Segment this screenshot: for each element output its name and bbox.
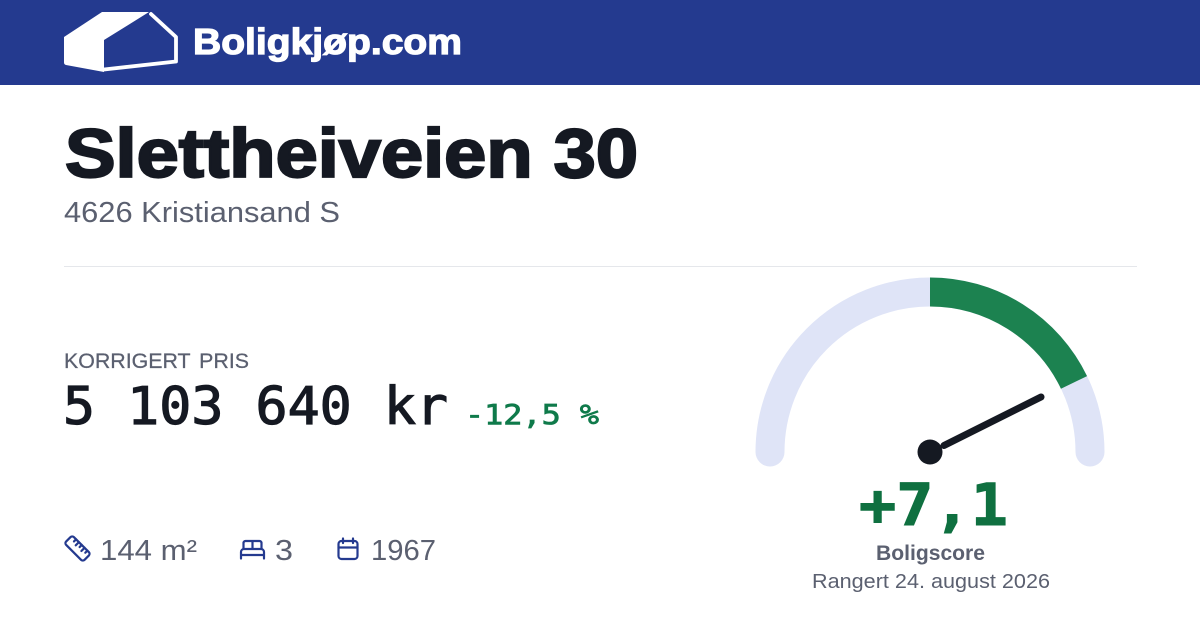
icon: calendar <box>338 538 358 559</box>
gauge <box>770 292 1090 464</box>
area text: 144 m² <box>100 535 197 567</box>
address: 4626 Kristiansand S <box>64 197 340 229</box>
header bar <box>0 0 1200 85</box>
ranking date: Rangert 24. august 2026 <box>812 571 1050 593</box>
gauge hub <box>918 440 942 464</box>
bedrooms text: 3 <box>275 535 293 567</box>
gauge value arc <box>930 292 1074 382</box>
logo: wordmark: Boligkjøp.com <box>193 21 462 62</box>
label: corrected price: KORRIGERT PRIS <box>64 350 249 373</box>
icon: ruler <box>64 535 91 562</box>
title: Slettheiveien 30 <box>65 115 638 192</box>
gauge track <box>770 292 1090 452</box>
score label: Boligscore <box>876 542 985 565</box>
year built text: 1967 <box>371 535 436 567</box>
score value: +7,1 <box>859 471 1008 539</box>
gauge needle <box>944 397 1041 446</box>
price change: -12,5 % <box>465 398 599 431</box>
price value: 5 103 640 kr <box>63 377 448 437</box>
icon: bed <box>241 541 264 558</box>
logo: house icon <box>64 12 176 72</box>
facts row <box>64 535 436 567</box>
